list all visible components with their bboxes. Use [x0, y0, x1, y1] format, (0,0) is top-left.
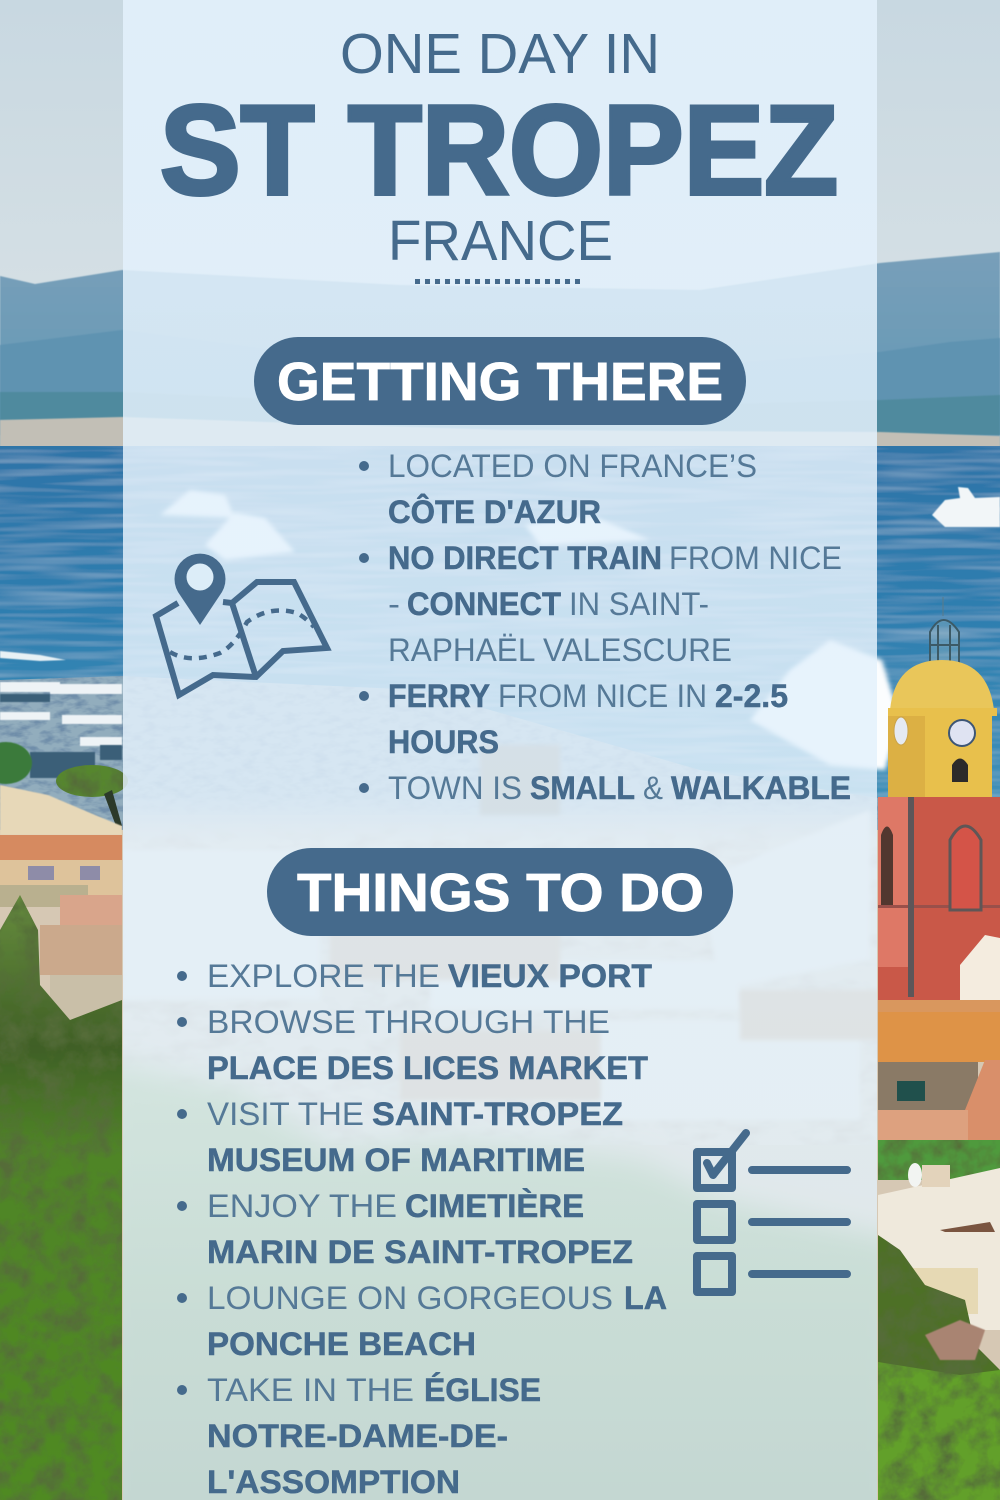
large yachts [160, 490, 900, 770]
cream roof terrace [898, 1268, 978, 1314]
dotted divider [415, 279, 580, 284]
sky [0, 0, 1000, 450]
pale buildings behind panel [122, 745, 880, 1120]
boat wake [0, 651, 66, 661]
harbour with boats [0, 676, 890, 830]
foliage behind panel [100, 1060, 900, 1500]
clock faces [894, 717, 908, 745]
cruise ship [932, 487, 1000, 527]
brown building [878, 1062, 978, 1110]
item: walkable: SMALL [530, 770, 635, 806]
item: beach: LOUNGE ON GORGEOUS [207, 1280, 613, 1316]
bright right foliage [878, 1362, 1000, 1500]
item: museum: MUSEUM OF MARITIME [207, 1142, 585, 1178]
church tower: lantern [930, 620, 959, 663]
item: church: ÉGLISE [424, 1372, 541, 1408]
heading pill: things to do [267, 848, 733, 936]
list: getting there [359, 448, 851, 806]
item: museum [207, 1096, 623, 1178]
translucent centre panel [123, 0, 877, 1500]
item: museum: SAINT-TROPEZ [372, 1096, 623, 1132]
title: st tropez: ST TROPEZ [160, 79, 838, 221]
church tower: dome [890, 660, 994, 710]
bullet markers [177, 971, 187, 1395]
land base under town and foliage [0, 815, 1000, 1500]
white house [960, 935, 1000, 1000]
item: ferry: FERRY [388, 678, 490, 714]
church tower: yellow belfry [888, 708, 997, 800]
distant hills [0, 252, 1000, 450]
heading pill: getting there: GETTING THERE [277, 352, 723, 412]
item: beach [207, 1280, 667, 1362]
item: beach: LA [624, 1280, 667, 1316]
item: walkable: WALKABLE [671, 770, 851, 806]
item: location [388, 448, 757, 530]
item: walkable [388, 770, 851, 806]
item: vieux port: EXPLORE THE [207, 958, 440, 994]
title block [160, 22, 838, 273]
bullet markers [359, 461, 369, 793]
item: market: BROWSE THROUGH THE [207, 1004, 610, 1040]
item: museum: VISIT THE [207, 1096, 364, 1132]
white walls [878, 1168, 1000, 1330]
item: ferry: HOURS [388, 724, 499, 760]
item: train: CONNECT [407, 586, 561, 622]
icon: checklist [697, 1133, 847, 1292]
moored boats, left edge [0, 682, 122, 746]
belfry window [952, 758, 968, 782]
item: cemetery: ENJOY THE [207, 1188, 397, 1224]
orange roofs [878, 1000, 1000, 1012]
church tower: red section [878, 797, 1000, 1002]
list: things to do [177, 958, 667, 1500]
title: one day in: ONE DAY IN [340, 22, 660, 86]
item: church [207, 1372, 541, 1500]
garden hedge [878, 1140, 1000, 1180]
item: train: FROM NICE [669, 540, 842, 576]
item: church: NOTRE-DAME-DE- [207, 1418, 508, 1454]
item: church: L'ASSOMPTION [207, 1464, 460, 1500]
item: ferry: FROM NICE IN [498, 678, 707, 714]
coastal town strip [0, 417, 1000, 452]
item: train [388, 540, 842, 668]
item: market: PLACE DES LICES MARKET [207, 1050, 648, 1086]
item: vieux port: VIEUX PORT [448, 958, 652, 994]
sea [0, 446, 1000, 800]
item: church: TAKE IN THE [207, 1372, 414, 1408]
item: beach: PONCHE BEACH [207, 1326, 476, 1362]
pink flowering bush [925, 1320, 985, 1360]
item: train: IN SAINT- [569, 586, 709, 622]
left buildings [0, 785, 122, 835]
harbour-to-town transition [123, 790, 877, 850]
heading pill: getting there [254, 337, 746, 425]
icon: map with location pin [156, 554, 327, 695]
item: market [207, 1004, 648, 1086]
dark boat hulls, left edge [0, 694, 122, 778]
item: cemetery: MARIN DE SAINT-TROPEZ [207, 1234, 633, 1270]
right trees [878, 1235, 1000, 1500]
left trees [0, 742, 32, 784]
item: walkable: TOWN IS [388, 770, 522, 806]
item: vieux port [207, 958, 652, 994]
lower hills with shoreline [0, 330, 1000, 435]
item: location: LOCATED ON FRANCE’S [388, 448, 757, 484]
item: ferry: 2-2.5 [715, 678, 788, 714]
town behind panel [123, 815, 877, 1145]
item: location: CÔTE D'AZUR [388, 494, 601, 530]
item: train: NO DIRECT TRAIN [388, 540, 662, 576]
item: ferry [388, 678, 788, 760]
item: cemetery [207, 1188, 633, 1270]
title: france: FRANCE [388, 209, 613, 273]
item: cemetery: CIMETIÈRE [405, 1188, 584, 1224]
item: train: RAPHAËL VALESCURE [388, 632, 732, 668]
left foliage [0, 895, 122, 1500]
heading pill: things to do: THINGS TO DO [297, 863, 704, 923]
item: walkable: & [643, 770, 663, 806]
item: train: - [388, 586, 400, 622]
